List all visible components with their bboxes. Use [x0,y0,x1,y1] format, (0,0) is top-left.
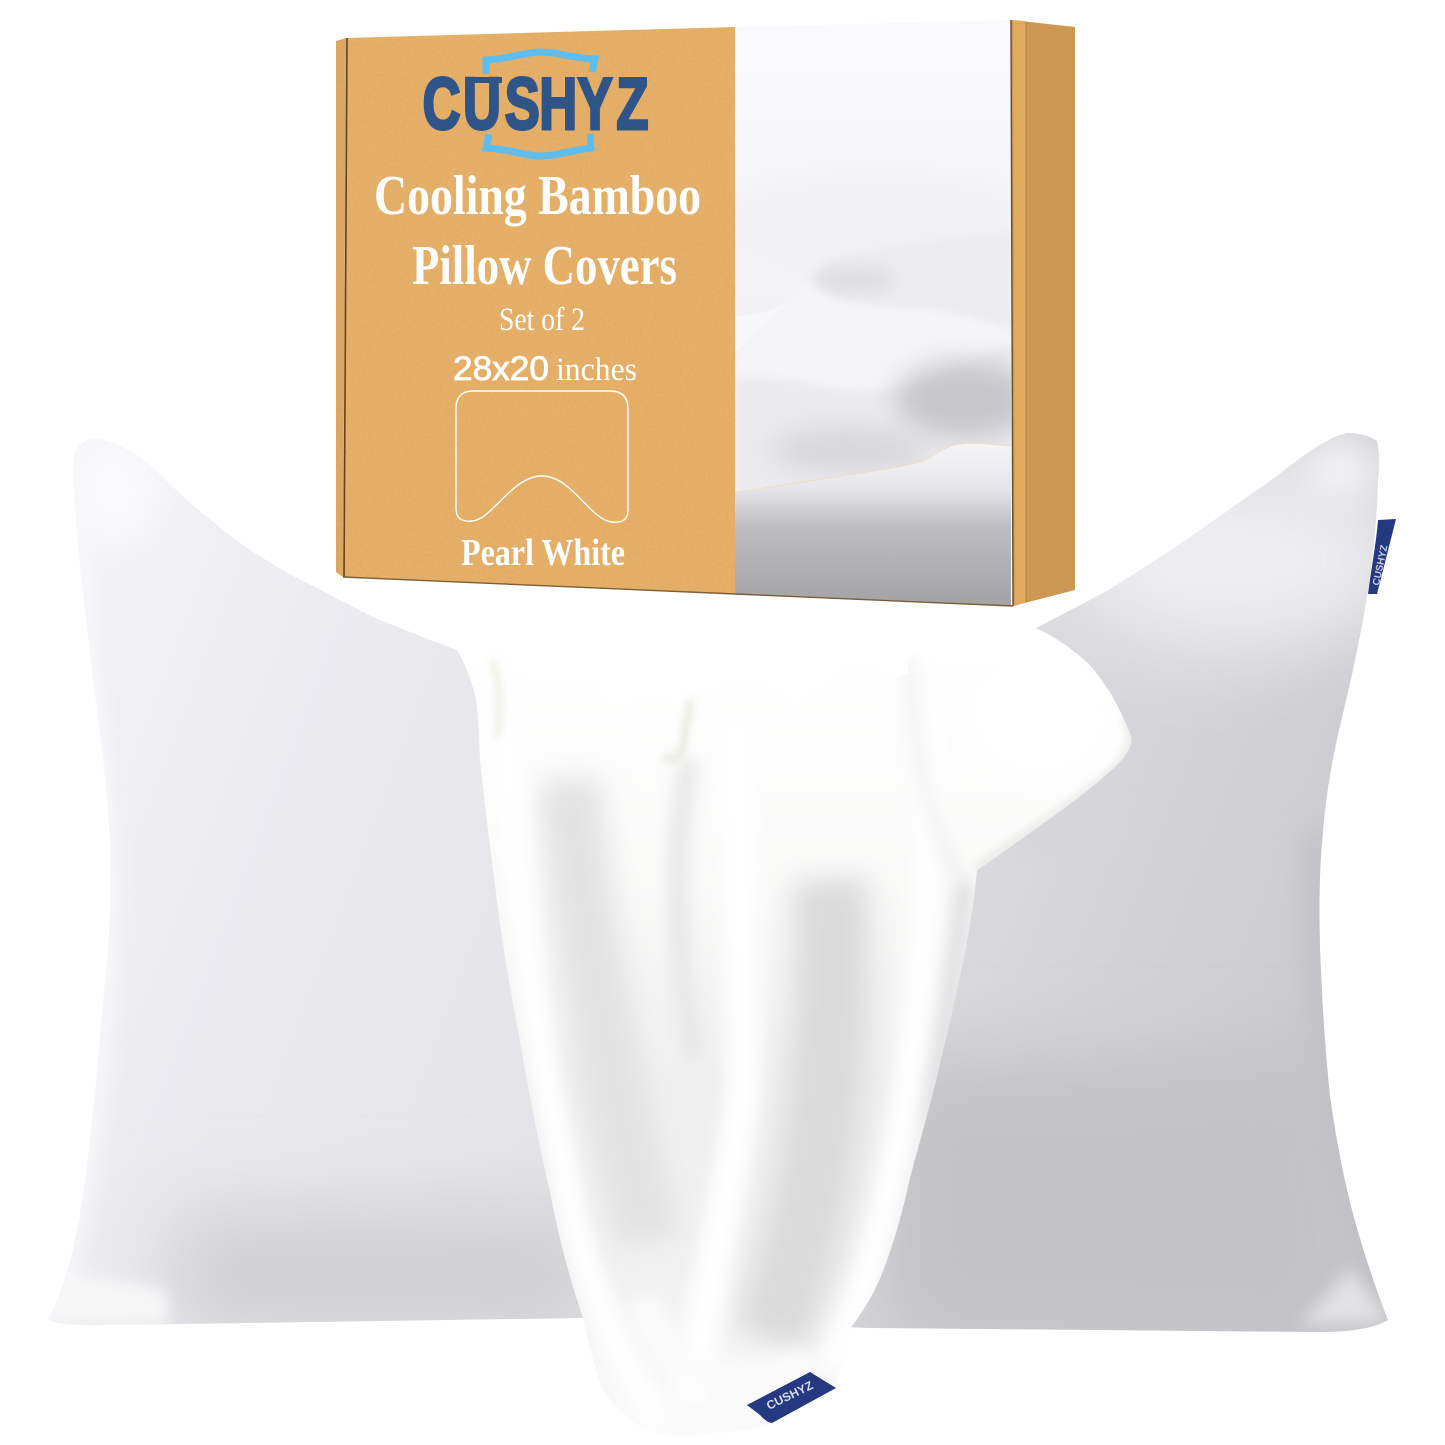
cover tag: bottom [747,1372,836,1423]
logo top bracket [486,52,595,74]
pillow tag: right edge: CUSHYZ [1371,544,1390,587]
pillow outline icon [456,391,628,522]
set of 2: Set of 2 [499,302,585,338]
box bottom edge [343,577,1013,606]
box title: Cooling Bamboo [374,165,701,227]
front hump [735,443,1011,610]
fabric photo panel [735,132,1011,606]
upper fold [813,232,1011,330]
lower fold with shaded band [740,351,1005,490]
tab folds and creases [492,660,500,738]
draped pillow cover [457,628,1132,1372]
box grain [343,22,1016,604]
box front kraft panel [343,27,735,594]
pillow body [40,425,1410,1350]
white highlights [518,911,628,1356]
logo wordmark: CUSHYZ [423,64,648,145]
product box [330,15,1080,615]
gray folds [570,780,650,1240]
pillow tag: right edge [1368,519,1396,594]
size: 28x20 [453,350,549,388]
cover tag: bottom: CUSHYZ [764,1378,815,1413]
product box: Pillow Covers [412,235,677,297]
size: inches [556,352,637,388]
logo bottom bracket [486,134,591,156]
size [453,350,637,388]
box right side panel [1011,20,1075,606]
colour name: Pearl White [461,532,625,574]
box left flap [336,38,346,577]
middle drape [735,284,1011,500]
logo [423,52,648,156]
